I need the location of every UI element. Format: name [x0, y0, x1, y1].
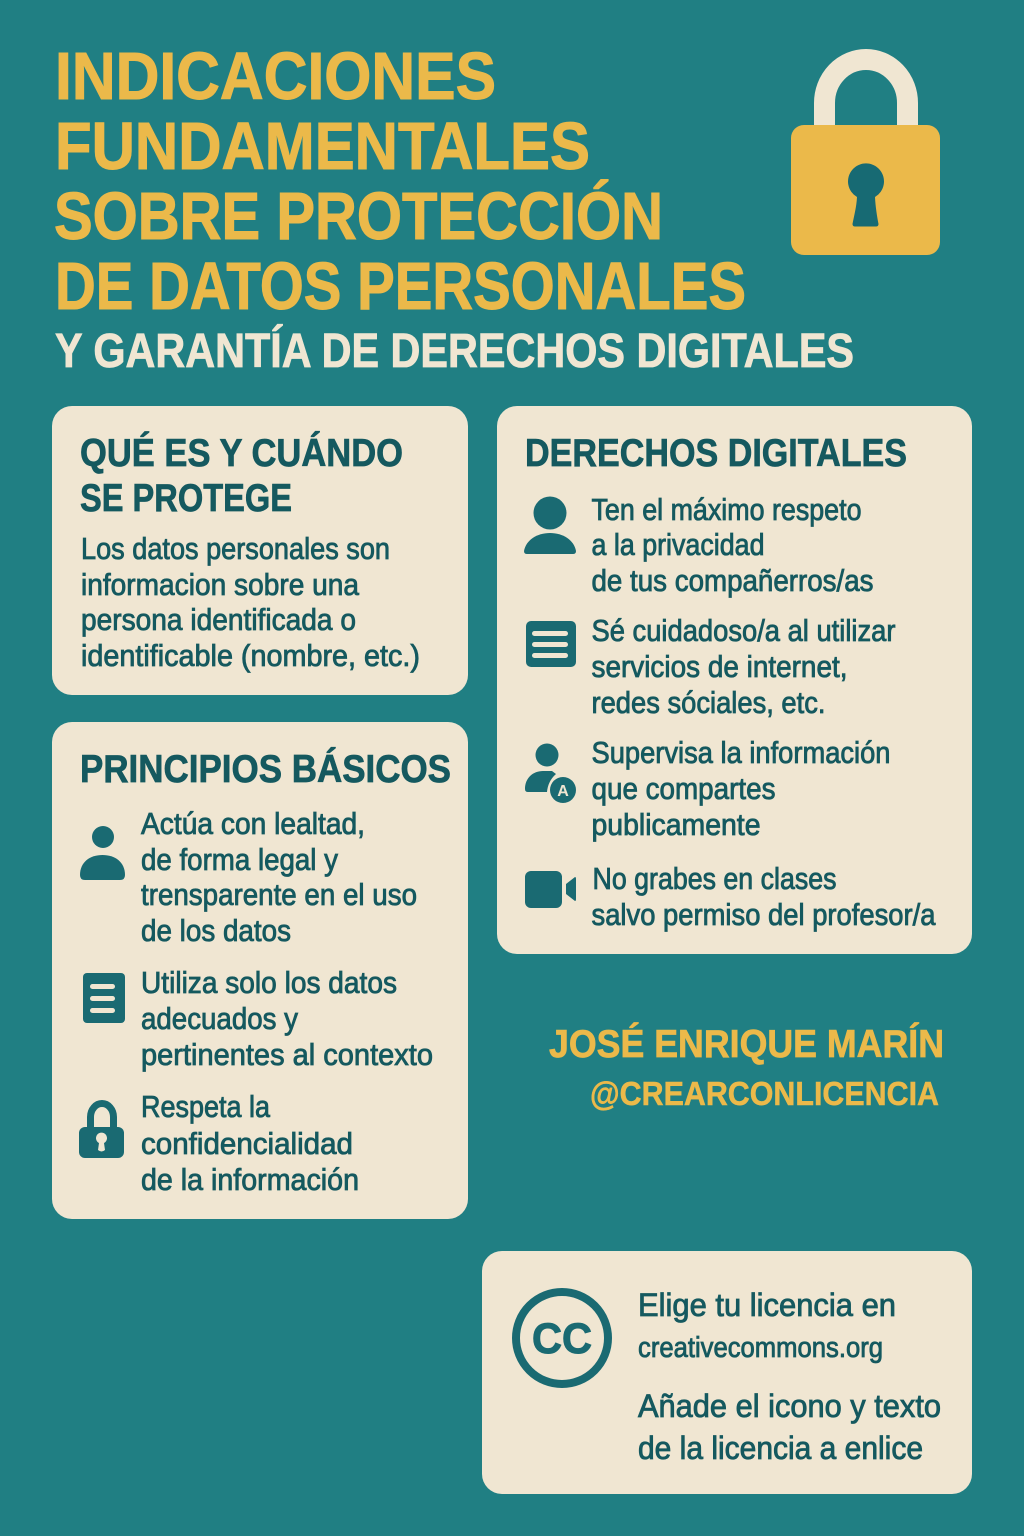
- icon: person with badge: A: [557, 783, 569, 800]
- title: [54, 39, 746, 324]
- text: definition: informacion sobre una: [81, 567, 360, 602]
- icon: person with badge: [525, 744, 576, 803]
- heading: qué es: SE PROTEGE: [80, 477, 292, 520]
- title: SOBRE PROTECCIÓN: [54, 179, 663, 254]
- text: datos adecuados: pertinentes al contexto: [141, 1037, 433, 1072]
- text: añade icono: Añade el icono y texto: [638, 1388, 941, 1424]
- icon: cc logo: [516, 1292, 608, 1384]
- text: elige licencia: creativecommons.org: [638, 1332, 883, 1364]
- heading: derechos digitales: DERECHOS DIGITALES: [525, 432, 907, 475]
- title: DE DATOS PERSONALES: [55, 249, 746, 324]
- title: FUNDAMENTALES: [55, 109, 590, 184]
- text: lealtad: de los datos: [141, 913, 291, 948]
- icon: small lock: [79, 1104, 124, 1158]
- text: lealtad: de forma legal y: [141, 842, 338, 877]
- panel: principios básicos: [52, 722, 468, 1219]
- text: confidencialidad: de la información: [141, 1162, 359, 1197]
- text: no grabes: No grabes en clases: [592, 861, 836, 896]
- text: supervisa: Supervisa la información: [592, 735, 890, 770]
- text: definition: identificable (nombre, etc.): [81, 638, 420, 673]
- icon: video camera: [525, 871, 576, 908]
- text: supervisa: publicamente: [592, 807, 760, 842]
- text: servicios de internet: servicios de internet,: [592, 649, 848, 684]
- text: lealtad: Actúa con lealtad,: [141, 806, 365, 841]
- icon: cc logo: CC: [532, 1315, 592, 1363]
- text: elige licencia: [638, 1287, 896, 1364]
- icon: padlock: [791, 59, 940, 255]
- text: añade icono: [638, 1388, 941, 1466]
- text: privacidad: de tus compañerros/as: [592, 563, 874, 598]
- text: añade icono: de la licencia a enlice: [638, 1430, 923, 1466]
- text: datos adecuados: [141, 965, 433, 1072]
- text: servicios de internet: Sé cuidadoso/a al utilizar: [592, 613, 896, 648]
- icon: document: [83, 973, 125, 1023]
- text: elige licencia: Elige tu licencia en: [638, 1287, 896, 1323]
- text: servicios de internet: [592, 613, 896, 720]
- text: privacidad: [592, 492, 874, 598]
- author credit: JOSÉ ENRIQUE MARÍN: [549, 1022, 944, 1066]
- text: servicios de internet: redes sóciales, etc.: [592, 685, 826, 720]
- text: datos adecuados: Utiliza solo los datos: [141, 965, 397, 1000]
- text: definition: persona identificada o: [81, 602, 356, 637]
- icon: list: [526, 621, 576, 667]
- text: lealtad: trensparente en el uso: [141, 877, 417, 912]
- heading: qué es: [80, 431, 403, 520]
- heading: principios básicos: PRINCIPIOS BÁSICOS: [80, 747, 451, 791]
- text: definition: [81, 531, 420, 673]
- panel: licencia creative commons: [482, 1251, 972, 1494]
- text: confidencialidad: [141, 1089, 359, 1197]
- heading: qué es: QUÉ ES Y CUÁNDO: [80, 431, 403, 475]
- text: lealtad: [141, 806, 417, 948]
- text: supervisa: que compartes: [592, 771, 776, 806]
- text: no grabes: salvo permiso del profesor/a: [592, 897, 936, 932]
- text: datos adecuados: adecuados y: [141, 1001, 298, 1036]
- title: INDICACIONES: [55, 39, 496, 114]
- text: confidencialidad: Respeta la: [141, 1089, 271, 1124]
- icon: person: [80, 826, 125, 880]
- subtitle: Y GARANTÍA DE DERECHOS DIGITALES: [55, 324, 854, 378]
- author credit: [549, 1022, 944, 1112]
- icon: person: [524, 496, 576, 554]
- text: confidencialidad: confidencialidad: [141, 1126, 353, 1161]
- panel: derechos digitales: [497, 406, 972, 954]
- text: privacidad: Ten el máximo respeto: [592, 492, 862, 527]
- author credit: @CREARCONLICENCIA: [590, 1075, 939, 1112]
- panel: qué es y cuándo se protege: [52, 406, 468, 695]
- text: definition: Los datos personales son: [81, 531, 390, 566]
- text: privacidad: a la privacidad: [592, 527, 764, 562]
- text: no grabes: [592, 861, 936, 932]
- text: supervisa: [592, 735, 890, 842]
